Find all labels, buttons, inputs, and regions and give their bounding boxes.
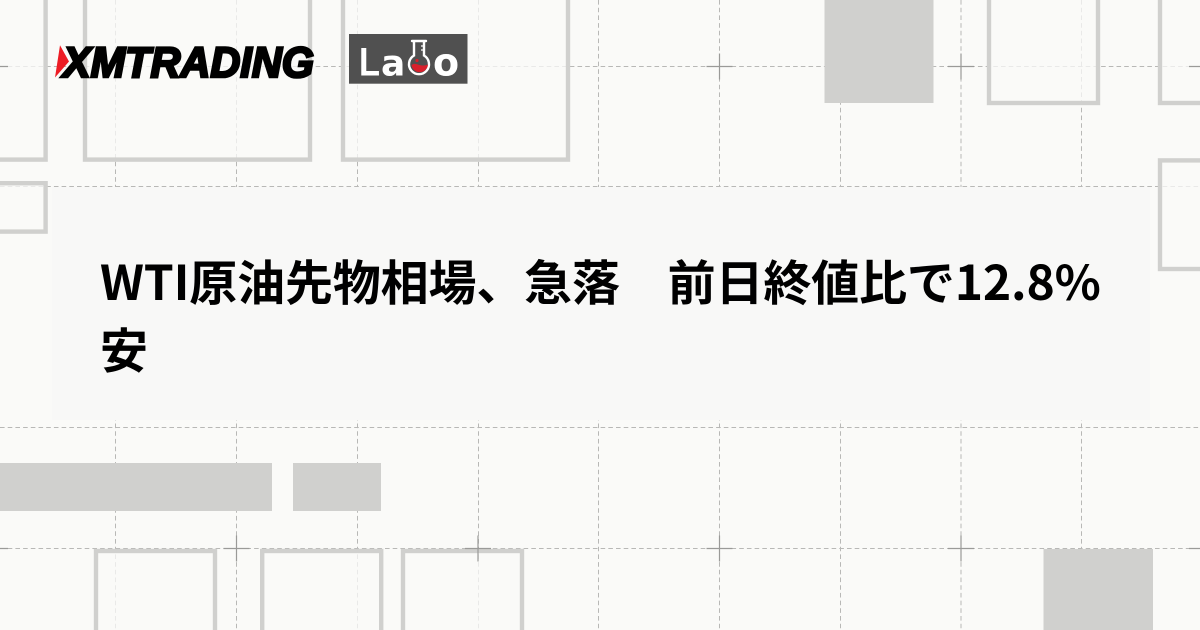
central title panel — [52, 187, 1150, 420]
logo: XMTRADING — [55, 40, 314, 84]
title: 安 — [100, 312, 148, 382]
logo letter o: o — [433, 40, 459, 84]
logo letter L: L — [359, 40, 380, 84]
logo letter a: a — [381, 43, 405, 84]
title: WTI原油先物相場、急落 前日終値比で12.8% — [100, 244, 1101, 314]
title — [100, 244, 1101, 382]
icon: red triangle — [55, 45, 69, 78]
icon: flask — [409, 41, 429, 74]
logo: Lab — [349, 34, 468, 84]
